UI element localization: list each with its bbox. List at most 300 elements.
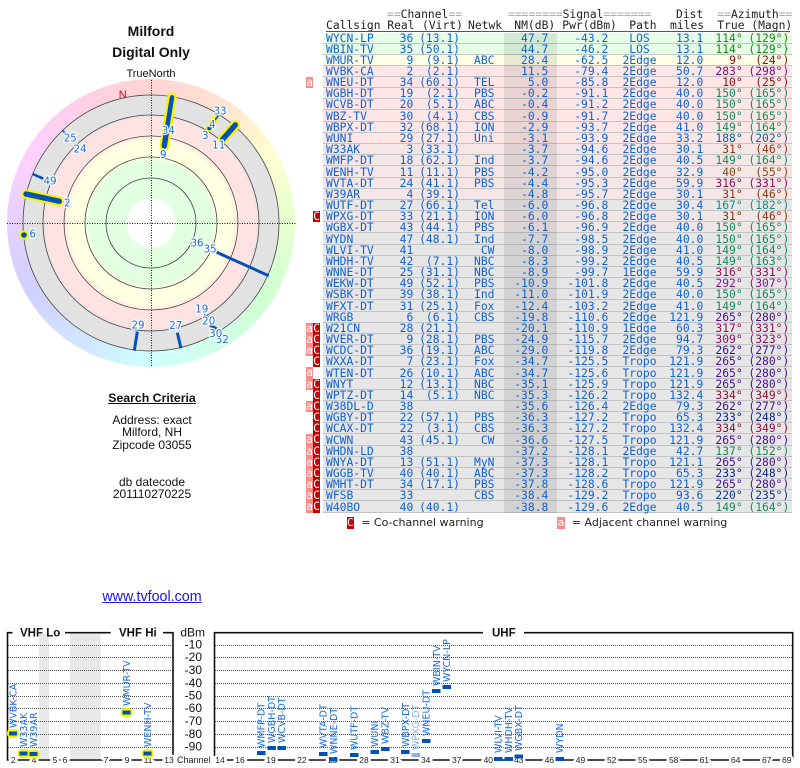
row: -4.4 [521, 176, 548, 190]
station name labels: WBIN-TV [432, 645, 443, 686]
channel axis labels: 2 [11, 755, 16, 765]
row: -110.6 [567, 310, 608, 324]
row: 49 [400, 276, 413, 290]
row [306, 490, 792, 501]
band headings: UHF [492, 628, 516, 640]
row: WCAX-DT [326, 421, 374, 435]
row: (164°) [748, 500, 789, 514]
row: (165°) [748, 97, 789, 111]
row: -11.0 [514, 287, 548, 301]
station name labels [8, 639, 566, 754]
station name labels: WPXG-DT [411, 704, 422, 750]
channel axis labels: 25 [328, 755, 338, 765]
row: PBS [474, 477, 494, 491]
row: 5.0 [528, 75, 548, 89]
channel axis labels: 19 [266, 755, 276, 765]
channel axis labels: 22 [297, 755, 307, 765]
channel number labels: 36 [190, 237, 204, 249]
channel axis labels: 55 [638, 755, 648, 765]
channel number labels: 32 [216, 334, 229, 346]
row: WPTZ-DT [326, 388, 374, 402]
row: W33AK [326, 142, 360, 156]
row: -20.1 [514, 321, 548, 335]
channel number labels: 20 [202, 316, 215, 328]
row: (202°) [748, 131, 789, 145]
title: Milford Digital Only [112, 23, 190, 60]
channel number labels: 35 [203, 243, 217, 255]
channel axis labels: 43 [514, 755, 524, 765]
row: -38.8 [514, 500, 548, 514]
row: 36 [400, 343, 413, 357]
row: (17.1) [419, 477, 460, 491]
row: C [313, 466, 320, 480]
row: 12.0 [676, 53, 703, 67]
row: 9° [729, 53, 743, 67]
row [306, 211, 792, 222]
channel axis labels: 46 [545, 755, 554, 765]
row: 30.4 [676, 198, 703, 212]
row: 2Edge [622, 97, 657, 111]
row: 2Edge [622, 332, 657, 346]
row: 36 [400, 31, 413, 45]
row: -8.9 [521, 265, 548, 279]
channel number labels: 33 [213, 105, 227, 117]
row [306, 278, 792, 289]
row: a [306, 75, 313, 89]
legend: adjacent channel warning: = Adjacent channel warning [572, 516, 727, 529]
row: 121.9 [669, 377, 703, 391]
row: (165°) [748, 86, 789, 100]
row: 265° [715, 477, 743, 491]
row: 34 [400, 477, 413, 491]
legend: adjacent channel warning: a [558, 516, 564, 529]
row: WGBY-DT [326, 410, 374, 424]
row: 3 [406, 142, 413, 156]
row: 220° [715, 488, 743, 502]
row: 40.5 [676, 153, 703, 167]
row: Ind [474, 232, 494, 246]
row: -125.9 [567, 377, 608, 391]
row: -34.7 [514, 354, 548, 368]
row: C [313, 399, 320, 413]
row: (2.1) [426, 86, 460, 100]
row: (28.1) [419, 332, 460, 346]
row: WYCN-LP [326, 31, 374, 45]
channel number labels: 6 [29, 228, 36, 240]
dBm axis labels: -20 [185, 650, 202, 664]
row: Uni [474, 131, 494, 145]
row: CBS [474, 421, 494, 435]
channel number labels [29, 105, 229, 346]
row [306, 312, 792, 323]
row: Tropo [622, 410, 657, 424]
row: -2.9 [521, 120, 548, 134]
row: (323°) [748, 332, 789, 346]
row: WPXG-DT [326, 209, 374, 223]
channel axis labels: 14 [215, 755, 225, 765]
row: 2Edge [622, 198, 657, 212]
row: 188° [715, 131, 743, 145]
compass N: N [119, 89, 127, 101]
row [306, 144, 792, 155]
row: WLVI-TV [326, 243, 374, 257]
row: 19 [400, 86, 413, 100]
row: C [313, 421, 320, 435]
row: -36.3 [514, 421, 548, 435]
channel axis labels: 64 [731, 755, 741, 765]
row [306, 367, 792, 379]
row: (46°) [755, 187, 789, 201]
row: 2Edge [622, 53, 657, 67]
row: 132.4 [669, 421, 703, 435]
row: 32.9 [676, 165, 703, 179]
row: -125.6 [567, 366, 608, 380]
row: 262° [715, 399, 743, 413]
row: (40.1) [419, 466, 460, 480]
table header: ========Signal======= [508, 7, 651, 21]
row: Tropo [622, 488, 657, 502]
row: WRGB [326, 310, 353, 324]
row: 31 [400, 299, 413, 313]
row: 60.3 [676, 321, 703, 335]
row: C [313, 343, 320, 357]
row: 12.0 [676, 75, 703, 89]
row: C [313, 477, 320, 491]
row: WNYT [326, 377, 353, 391]
channel axis labels: 11 [144, 755, 153, 765]
channel number labels: 3 [202, 130, 209, 142]
north label: TrueNorth [126, 68, 176, 80]
highlighted VHF station bars [7, 708, 154, 758]
highlighted station bars [19, 97, 235, 240]
row: LOS [629, 31, 650, 45]
row: (52.1) [419, 276, 460, 290]
row: 2Edge [622, 142, 657, 156]
row: 22 [400, 410, 413, 424]
row: 13 [400, 455, 413, 469]
row: 32 [400, 120, 413, 134]
row: Tel [474, 198, 494, 212]
row: Tropo [622, 466, 657, 480]
channel axis labels: 28 [359, 755, 369, 765]
row: ABC [474, 53, 494, 67]
dBm axis labels: -30 [185, 663, 202, 677]
row: 42 [400, 254, 413, 268]
row: PBS [474, 220, 494, 234]
row [306, 401, 792, 412]
row: 2Edge [622, 109, 657, 123]
row [306, 345, 792, 356]
row: 40.0 [676, 220, 703, 234]
row: (349°) [748, 388, 789, 402]
row: 42.7 [676, 444, 703, 458]
row [306, 479, 792, 490]
row: 233° [715, 466, 743, 480]
row: (5.1) [426, 388, 460, 402]
row: 2Edge [622, 444, 657, 458]
row: 167° [715, 198, 743, 212]
row: 6 [406, 310, 413, 324]
row: 2Edge [622, 287, 657, 301]
row: -37.8 [514, 477, 548, 491]
channel axis labels: 5 [53, 755, 58, 765]
table header: True [717, 18, 745, 32]
row: PBS [474, 332, 494, 346]
row: -127.2 [567, 410, 608, 424]
channel axis labels: 6 [63, 755, 68, 765]
station name labels: WYCN-LP [442, 639, 453, 682]
row: WBPX-DT [326, 120, 374, 134]
row: (5.1) [426, 97, 460, 111]
row: 40 [400, 500, 413, 514]
row: 2Edge [622, 310, 657, 324]
row: -128.6 [567, 477, 608, 491]
row [306, 44, 792, 55]
row: -35.3 [514, 388, 548, 402]
row: -128.1 [567, 455, 608, 469]
row: -3.7 [521, 142, 548, 156]
row [306, 222, 792, 233]
table header: (Magn) [751, 18, 792, 32]
row: (62.1) [419, 153, 460, 167]
row: 2Edge [622, 232, 657, 246]
row [306, 323, 792, 334]
row: (66.1) [419, 198, 460, 212]
row: (164°) [748, 153, 789, 167]
dBm axis labels: -80 [185, 727, 202, 741]
row: (248°) [748, 410, 789, 424]
channel axis labels: 67 [762, 755, 772, 765]
row: -0.4 [521, 97, 548, 111]
row: C [313, 321, 320, 335]
row: (13.1) [419, 377, 460, 391]
row: ABC [474, 366, 494, 380]
row: WNYA-DT [326, 455, 374, 469]
row: a [306, 343, 313, 357]
row: 121.9 [669, 354, 703, 368]
row: (46°) [755, 142, 789, 156]
row: (280°) [748, 433, 789, 447]
row: (41.1) [419, 176, 460, 190]
row: WVER-DT [326, 332, 374, 346]
row: WGBX-DT [326, 220, 374, 234]
row: 2Edge [622, 153, 657, 167]
row: -93.9 [574, 131, 608, 145]
row [306, 66, 792, 77]
row: -62.5 [574, 53, 608, 67]
station name labels: WBPX-DT [401, 703, 412, 747]
row: (23.1) [419, 354, 460, 368]
table header: Dist [676, 7, 703, 21]
row: a [306, 455, 313, 469]
row: -37.3 [514, 455, 548, 469]
weak station bars [33, 130, 269, 351]
row: (21.1) [419, 209, 460, 223]
row [306, 356, 792, 367]
row: (10.1) [419, 366, 460, 380]
row: 43 [400, 220, 413, 234]
station name labels: WUTF-DT [350, 706, 360, 750]
row: NBC [474, 388, 494, 402]
row: Tropo [622, 354, 657, 368]
row: -24.9 [514, 332, 548, 346]
row: 2Edge [622, 176, 657, 190]
row: (280°) [748, 310, 789, 324]
row: -36.6 [514, 433, 548, 447]
row: (45.1) [419, 433, 460, 447]
row: 40.0 [676, 97, 703, 111]
row: WBIN-TV [326, 42, 374, 56]
row: WNEU-DT [326, 75, 374, 89]
row: 292° [715, 276, 743, 290]
row: (235°) [748, 488, 789, 502]
channel axis labels: 61 [700, 755, 709, 765]
station name labels: WENH-TV [143, 702, 154, 747]
channel number labels: 25 [64, 133, 77, 145]
row: C [313, 377, 320, 391]
polar chart [7, 68, 296, 367]
channel axis labels: 9 [125, 755, 130, 765]
row: a [306, 399, 313, 413]
row: -103.2 [567, 299, 608, 313]
row: Tropo [622, 433, 657, 447]
row: (44.1) [419, 220, 460, 234]
row: 2Edge [622, 243, 657, 257]
row: WNNE-DT [326, 265, 374, 279]
row: PBS [474, 410, 494, 424]
row: 4 [406, 187, 413, 201]
row: C [313, 432, 320, 446]
row: 41.0 [676, 299, 703, 313]
row: NBC [474, 254, 494, 268]
row [306, 379, 792, 390]
row: PBS [474, 165, 494, 179]
row: WCDC-DT [326, 343, 374, 357]
row: WFSB [326, 488, 353, 502]
row: -125.5 [567, 354, 608, 368]
row: 28.4 [521, 53, 548, 67]
station table [306, 7, 792, 514]
row: 2Edge [622, 165, 657, 179]
row: a [306, 488, 313, 502]
row: (2.1) [426, 64, 460, 78]
row [306, 334, 792, 345]
row: WXXA-DT [326, 354, 374, 368]
row: 149° [715, 254, 743, 268]
row: -35.1 [514, 377, 548, 391]
dBm axis labels [180, 626, 205, 754]
row: W39AR [326, 187, 360, 201]
row: 150° [715, 86, 743, 100]
row: WGGB-TV [326, 466, 374, 480]
table header: Real [387, 18, 415, 32]
row: (7.1) [426, 254, 460, 268]
row: 93.6 [676, 488, 703, 502]
row: -0.2 [521, 86, 548, 100]
row: 2Edge [622, 131, 657, 145]
row: 38 [400, 444, 413, 458]
UHF station bars [257, 685, 564, 762]
row: 30.1 [676, 187, 703, 201]
row: 262° [715, 343, 743, 357]
row: -95.0 [574, 165, 608, 179]
row: -7.7 [521, 232, 548, 246]
row: WMHT-DT [326, 477, 374, 491]
channel axis labels: 7 [104, 755, 109, 765]
row: CBS [474, 310, 494, 324]
row: 65.3 [676, 410, 703, 424]
row: 33.2 [676, 131, 703, 145]
row: 28 [400, 321, 413, 335]
row [306, 55, 792, 66]
row: ABC [474, 466, 494, 480]
row: 22 [400, 421, 413, 435]
row: C [313, 354, 320, 368]
row: 7 [406, 354, 413, 368]
row: a [306, 444, 313, 458]
grid lines [8, 646, 792, 748]
row: 13.1 [676, 42, 703, 56]
row: WMUR-TV [326, 53, 374, 67]
row [306, 110, 792, 122]
legend: co-channel warning: = Co-channel warning [361, 516, 484, 529]
table header: Path [629, 18, 657, 32]
row: -94.6 [574, 142, 608, 156]
row: (331°) [748, 321, 789, 335]
row: WFXT-DT [326, 299, 374, 313]
row: 2Edge [622, 399, 657, 413]
row: 79.3 [676, 399, 703, 413]
row: -99.2 [574, 254, 608, 268]
row: 34 [400, 75, 413, 89]
row: 265° [715, 377, 743, 391]
row: (33.1) [419, 142, 460, 156]
row: 10° [722, 75, 743, 89]
NM column shading [504, 33, 557, 513]
row: (280°) [748, 477, 789, 491]
row: 18 [400, 153, 413, 167]
row: (152°) [748, 444, 789, 458]
row: WHDH-TV [326, 254, 374, 268]
row: (280°) [748, 366, 789, 380]
row: -127.2 [567, 421, 608, 435]
row: -79.4 [574, 64, 608, 78]
row: 79.3 [676, 343, 703, 357]
row: -93.7 [574, 120, 608, 134]
channel axis labels: 16 [235, 755, 245, 765]
row: Ind [474, 287, 494, 301]
row: NBC [474, 377, 494, 391]
row: (68.1) [419, 120, 460, 134]
row: (165°) [748, 287, 789, 301]
row: 2Edge [622, 209, 657, 223]
station name labels: WLVI-TV [494, 715, 504, 753]
row: 283° [715, 64, 743, 78]
row: (25°) [755, 75, 789, 89]
row: 2 [406, 64, 413, 78]
channel axis labels: 40 [484, 755, 493, 765]
row: CBS [474, 109, 494, 123]
row: 33 [400, 209, 413, 223]
row: -119.8 [567, 343, 608, 357]
row: 265° [715, 366, 743, 380]
dBm axis labels: -40 [185, 676, 202, 690]
row: 2Edge [622, 500, 657, 514]
row: C [313, 499, 320, 513]
row: 40.0 [676, 232, 703, 246]
row: -34.7 [514, 366, 548, 380]
website link: www.tvfool.com [102, 589, 202, 605]
